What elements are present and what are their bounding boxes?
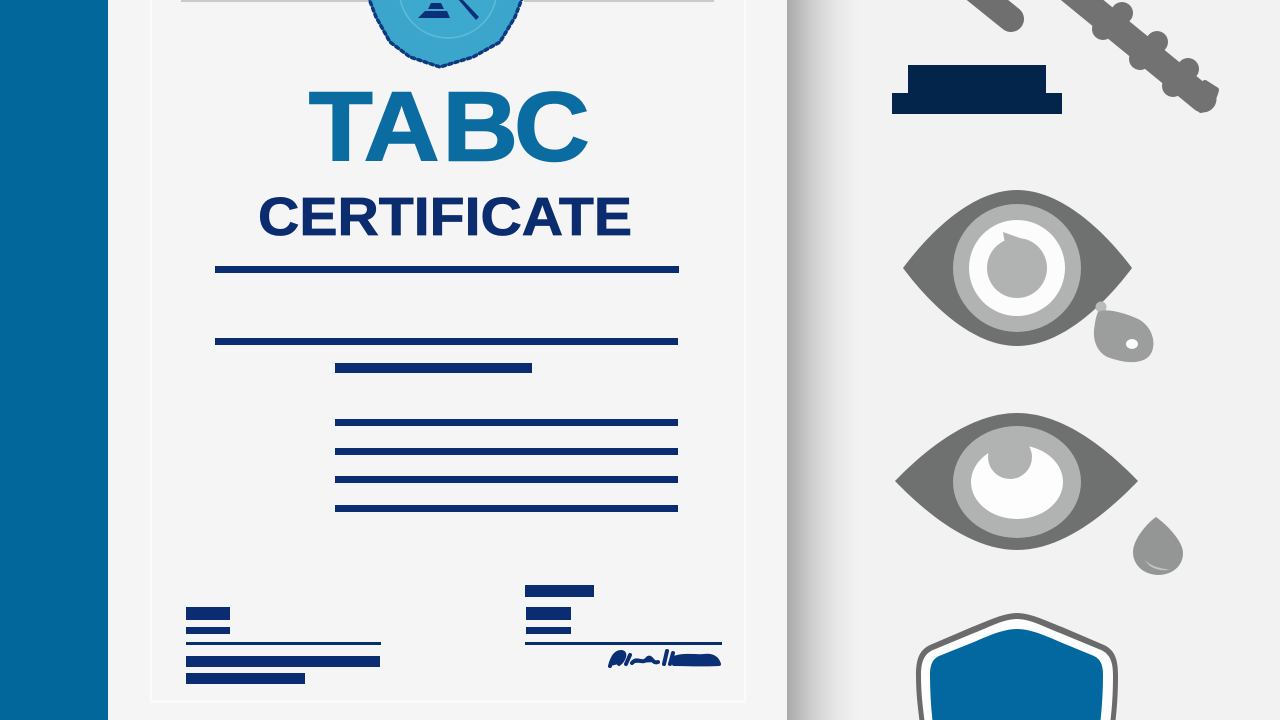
panel: right background: [787, 0, 1280, 720]
panel: certificate paper: [108, 0, 787, 720]
paper shadow: [787, 0, 859, 720]
heading: CERTIFICATE: CERTIFICATE: [258, 187, 632, 247]
text lines: right footer block: [525, 585, 722, 645]
icon: eye with tear, upper: [903, 190, 1153, 362]
top border rules: [181, 0, 714, 2]
text lines: certificate body: [215, 266, 679, 512]
signature: [610, 651, 719, 666]
panel: left blue band: [0, 0, 108, 720]
icon: navy stamp base: [892, 65, 1062, 114]
icon: eye with tear, lower: [895, 413, 1183, 575]
text lines: left footer block: [186, 607, 381, 684]
tear drop: [1094, 302, 1153, 362]
icon: seal badge: [368, 0, 523, 67]
icon: gavel: [418, 0, 479, 20]
tear drop: [1133, 517, 1183, 575]
icon: gray tool handle: [975, 0, 1011, 19]
icon: gray serrated rod: [1070, 0, 1216, 110]
icon: blue shield: [916, 613, 1118, 720]
title: TABC: TABC: [309, 72, 590, 182]
